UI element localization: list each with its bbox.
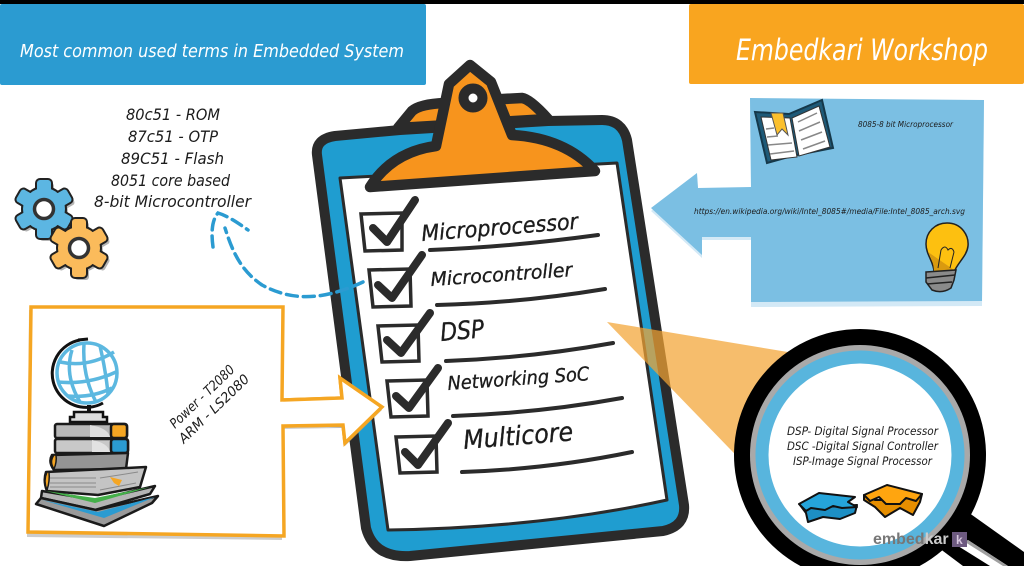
text: DSP definitions: DSC -Digital Signal Controller xyxy=(787,439,939,453)
icon: globe xyxy=(52,339,117,422)
text: Power and ARM parts: Power - T2080 xyxy=(167,362,238,432)
icon: blue puzzle piece xyxy=(799,493,857,522)
text: Power and ARM parts: ARM - LS2080 xyxy=(175,371,253,448)
item: Microcontroller: Microcontroller xyxy=(430,259,574,291)
text block: 8051 variants: 8-bit Microcontroller xyxy=(94,192,252,211)
header: Embedkari Workshop xyxy=(689,4,1024,84)
text block: 8051 variants: 80c51 - ROM xyxy=(126,105,221,124)
text block: 8051 variants: 8051 core based xyxy=(111,171,231,190)
text: DSP definitions: DSP- Digital Signal Processor xyxy=(787,424,939,438)
check items xyxy=(361,200,632,473)
magnifier lens xyxy=(734,329,986,566)
watermark: embedkari: embedkar xyxy=(873,531,949,548)
text: Power and ARM parts xyxy=(167,362,253,448)
header: Embedkari Workshop: Embedkari Workshop xyxy=(736,33,988,67)
icon: light bulb xyxy=(926,223,968,292)
icon: stack of books xyxy=(36,424,158,526)
clip xyxy=(370,65,595,187)
header: most common used terms: Most common used terms in Embedded System xyxy=(20,41,404,62)
panel: blue note with arrow xyxy=(651,98,984,307)
arrow: orange arrow over clipboard xyxy=(283,378,382,446)
clipboard board xyxy=(317,120,684,556)
item: Microcontroller xyxy=(369,255,605,307)
text block: 8051 variants: 89C51 - Flash xyxy=(121,149,224,168)
item: Networking SoC xyxy=(387,363,622,417)
text: DSP definitions: ISP-Image Signal Processor xyxy=(793,454,933,468)
header: most common used terms xyxy=(0,4,426,85)
beam: orange magnifier light xyxy=(607,322,800,480)
magnifier xyxy=(734,329,1024,566)
clipboard paper xyxy=(340,163,667,530)
icon: open book xyxy=(755,100,833,163)
item: Multicore: Multicore xyxy=(462,417,574,456)
item: Multicore xyxy=(396,417,632,473)
arrow: dashed blue curve xyxy=(212,213,363,297)
icon: gears xyxy=(15,180,111,280)
clipboard xyxy=(317,65,684,556)
item: DSP xyxy=(378,313,613,362)
magnifier handle xyxy=(935,510,1024,566)
item: Microprocessor xyxy=(361,200,598,251)
watermark: embedkari: k xyxy=(956,533,963,547)
text: 8085 label: 8085-8 bit Microprocessor xyxy=(858,120,954,129)
panel: orange frame with arrow xyxy=(27,307,382,540)
text block: 8051 variants: 87c51 - OTP xyxy=(128,127,218,146)
item: Microprocessor: Microprocessor xyxy=(421,210,581,247)
text block: 8051 variants xyxy=(94,105,252,211)
text: URL: https://en.wikipedia.org/wiki/Intel_8085#/media/File:Intel_8085_arch.svg xyxy=(694,207,965,216)
item: DSP: DSP xyxy=(439,314,486,347)
text: DSP definitions xyxy=(787,424,939,468)
item: Networking SoC: Networking SoC xyxy=(447,363,590,395)
icon: orange puzzle piece xyxy=(864,485,922,517)
